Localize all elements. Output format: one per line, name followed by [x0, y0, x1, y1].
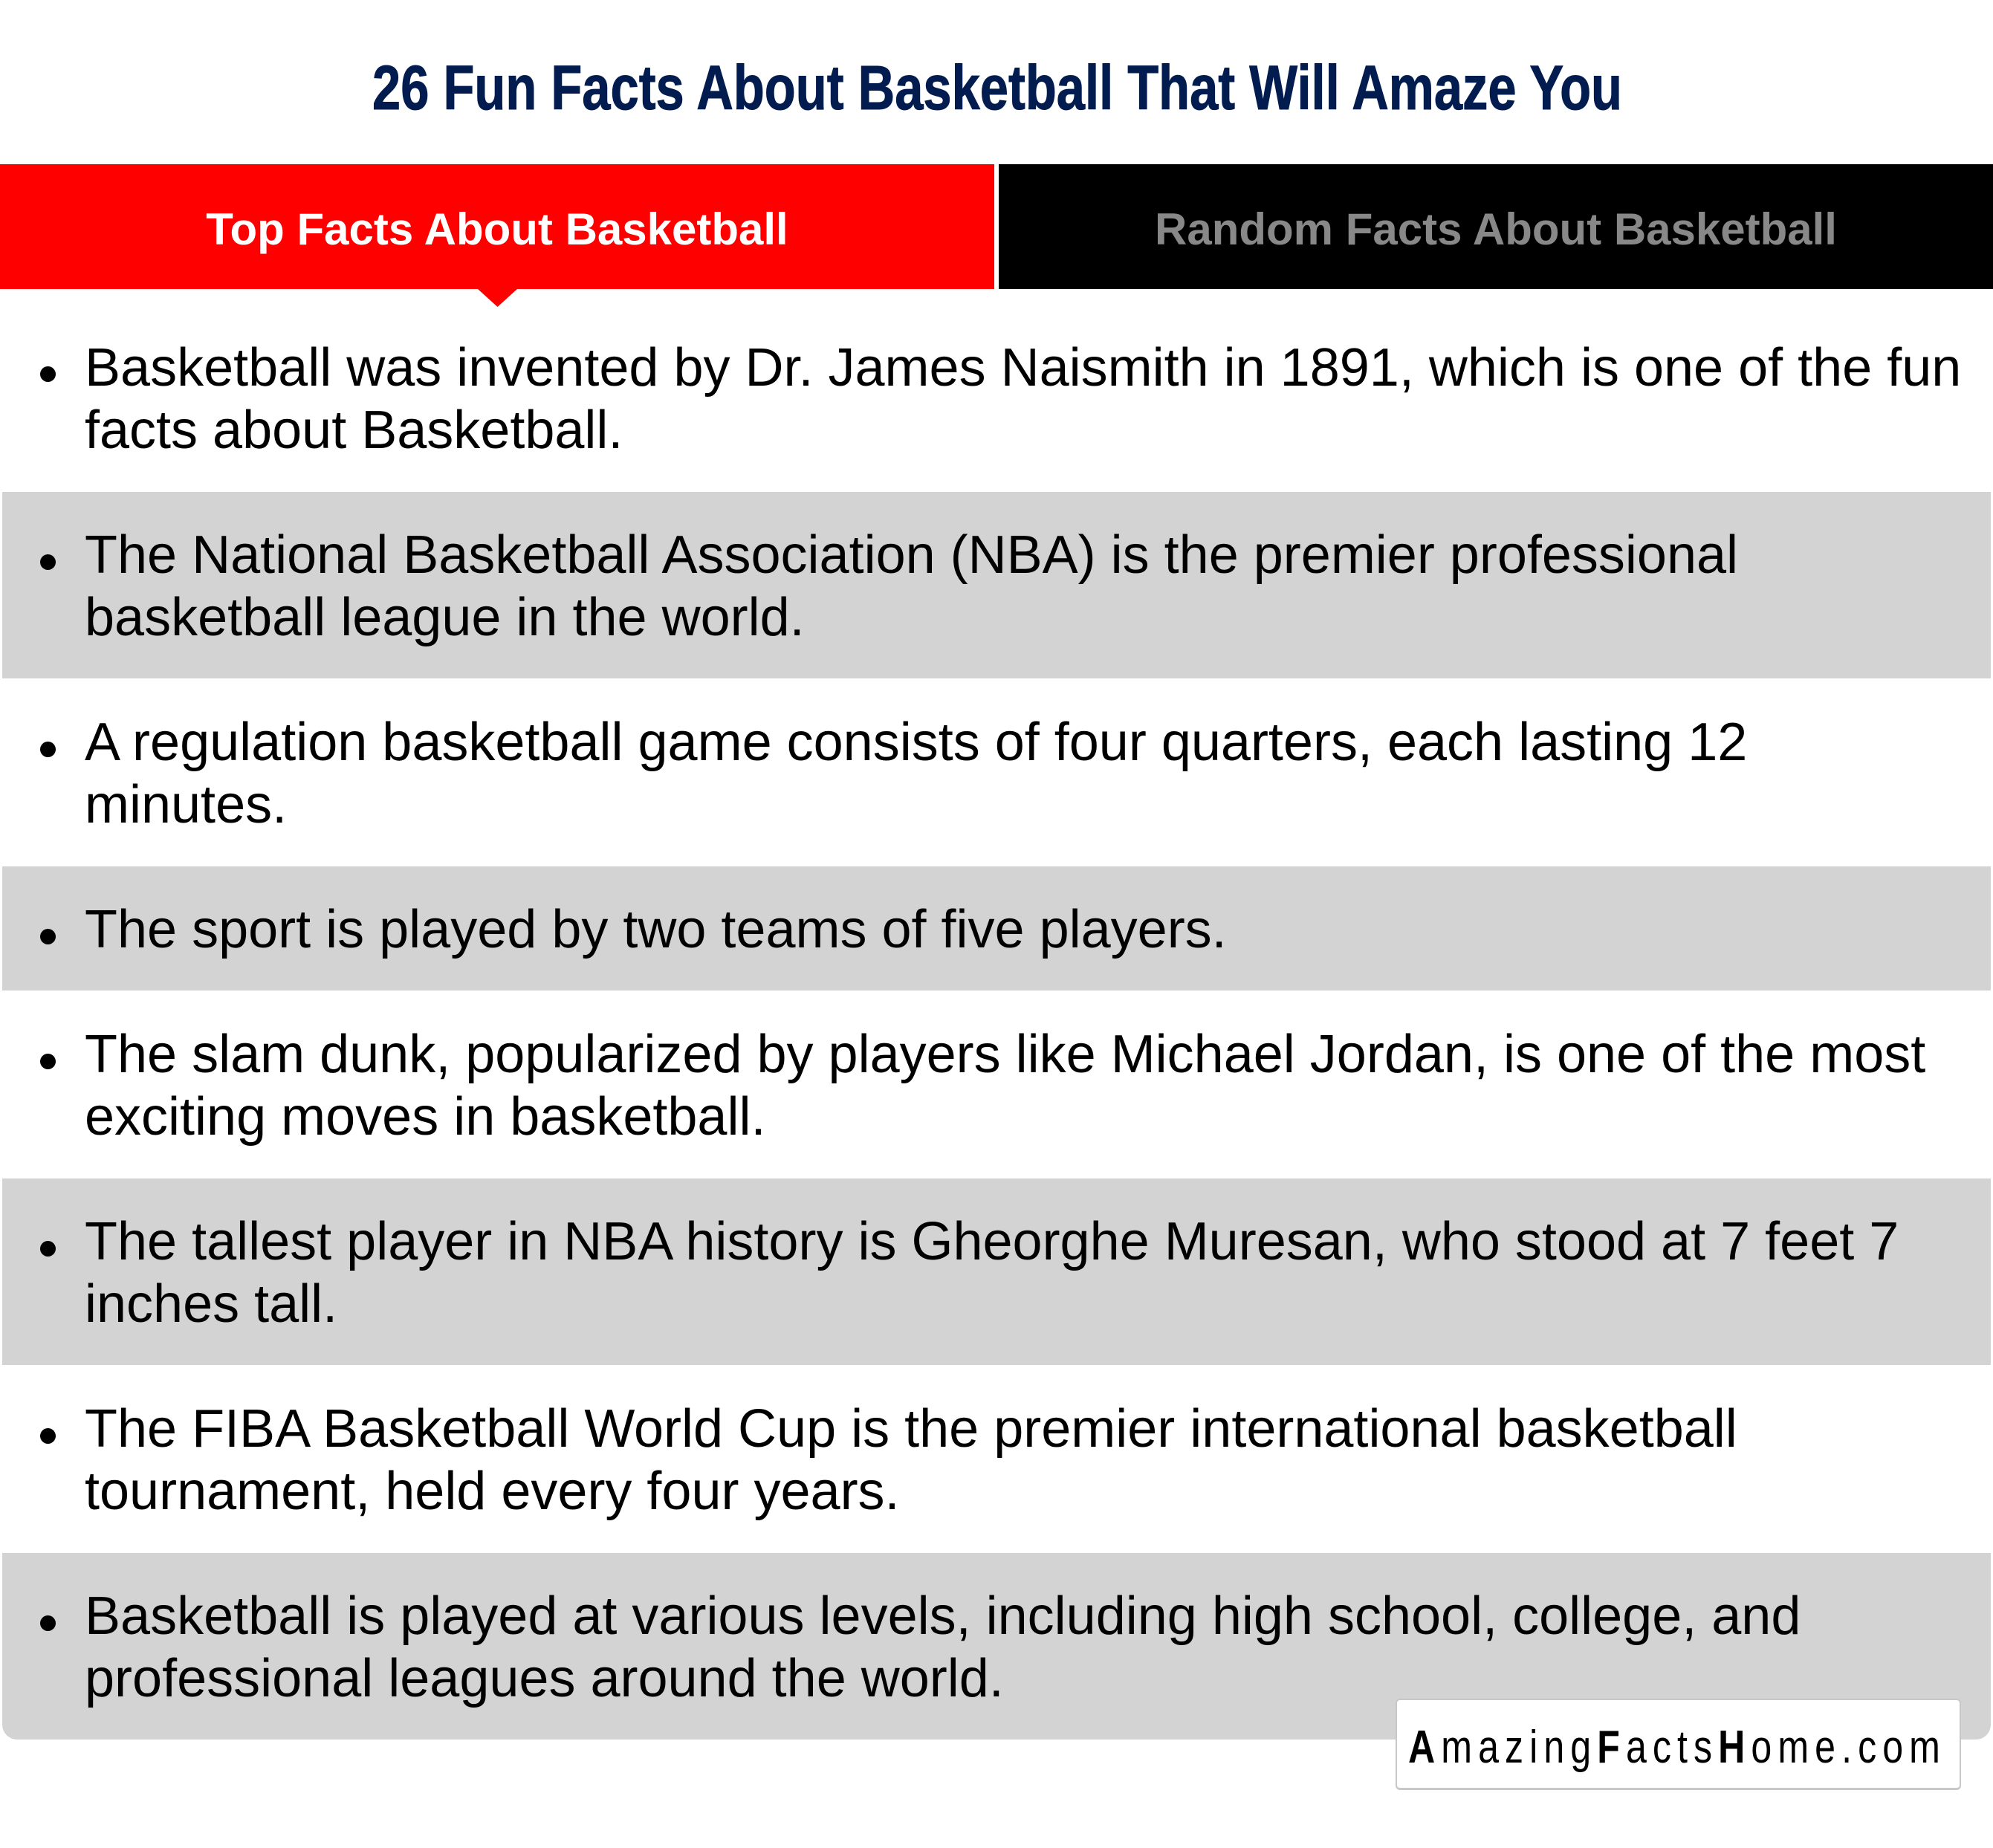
tab label: random facts: Random Facts About Basketball	[1155, 204, 1837, 254]
bullet	[40, 554, 56, 570]
bullet	[40, 1241, 56, 1257]
fact text	[85, 1586, 1801, 1708]
bullet	[40, 929, 56, 944]
tab: top facts	[0, 164, 994, 289]
fact 2	[2, 492, 1991, 678]
bullet	[40, 366, 56, 382]
tab label: top facts: Top Facts About Basketball	[206, 204, 788, 254]
fact text: The slam dunk, popularized by players like Michael Jordan, is one of the most	[85, 1025, 1925, 1084]
fact text: The National Basketball Association (NBA) is the premier professional	[85, 525, 1738, 585]
fact text: A regulation basketball game consists of four quarters, each lasting 12	[85, 713, 1747, 772]
fact 7	[40, 1399, 1737, 1521]
icon: tab pointer arrow	[478, 289, 517, 307]
fact text	[85, 338, 1961, 460]
fact text	[85, 713, 1747, 834]
bullet	[40, 742, 56, 757]
fact text: basketball league in the world.	[85, 588, 805, 647]
fact text: inches tall.	[85, 1274, 337, 1334]
fact text: tournament, held every four years.	[85, 1462, 900, 1521]
fact text: The FIBA Basketball World Cup is the premier international basketball	[85, 1399, 1737, 1459]
fact text	[85, 525, 1738, 647]
fact text: Basketball was invented by Dr. James Naismith in 1891, which is one of the fun	[85, 338, 1961, 398]
fact text: The tallest player in NBA history is Gheorghe Muresan, who stood at 7 feet 7	[85, 1212, 1899, 1271]
fact text: facts about Basketball.	[85, 401, 623, 460]
fact 4	[2, 866, 1991, 991]
fact text	[85, 1399, 1737, 1521]
fact text: exciting moves in basketball.	[85, 1087, 765, 1147]
fact 8	[2, 1553, 1991, 1740]
bullet	[40, 1615, 56, 1631]
bullet	[40, 1428, 56, 1444]
bullet	[40, 1054, 56, 1069]
fact text	[85, 1212, 1899, 1334]
fact text: The sport is played by two teams of five players.	[85, 900, 1227, 959]
fact text: minutes.	[85, 775, 287, 834]
fact 1	[40, 338, 1961, 460]
fact 6	[2, 1178, 1991, 1365]
watermark badge	[1396, 1699, 1961, 1790]
fact text: professional leagues around the world.	[85, 1649, 1004, 1708]
fact text: Basketball is played at various levels, including high school, college, and	[85, 1586, 1801, 1646]
fact 3	[40, 713, 1747, 834]
fact 5	[40, 1025, 1925, 1147]
tab: random facts	[999, 164, 1993, 289]
fact text	[85, 1025, 1925, 1147]
